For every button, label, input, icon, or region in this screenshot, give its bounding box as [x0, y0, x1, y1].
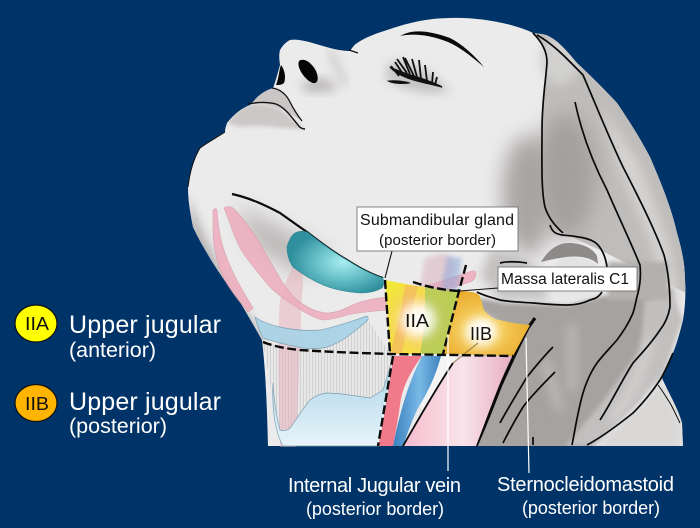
level IIB zone	[443, 291, 530, 356]
strap muscle	[278, 262, 303, 447]
soft shading on the side of the face	[502, 135, 554, 255]
label: internal jugular vein: Internal Jugular vein	[288, 475, 461, 497]
legend: IIB upper jugular posterior: Upper jugular	[69, 388, 221, 416]
label IIB: IIB	[470, 324, 492, 344]
badge IIA	[15, 305, 57, 342]
white gap	[418, 356, 458, 408]
legend: IIB upper jugular posterior: (posterior)	[69, 414, 167, 438]
face and hair silhouette	[180, 10, 700, 450]
label: internal jugular vein: (posterior border)	[306, 499, 444, 519]
hyoid bone	[255, 316, 368, 349]
label IIA: IIA	[405, 311, 429, 331]
leader line: massa lateralis	[460, 288, 498, 291]
lower lip shading	[227, 104, 305, 129]
thyroid cartilage	[273, 357, 393, 446]
callout: submandibular gland	[357, 207, 518, 251]
submandibular gland	[287, 231, 384, 293]
faint muscle edge over level IIB	[453, 343, 478, 363]
callout: massa lateralis C1: Massa lateralis C1	[501, 271, 629, 288]
legend: IIA upper jugular anterior: (anterior)	[69, 338, 156, 362]
legend: IIA upper jugular anterior: Upper jugular	[69, 311, 221, 339]
label: internal jugular vein	[288, 475, 461, 519]
badge IIA: IIA	[25, 314, 49, 334]
callout: submandibular gland: (posterior border)	[379, 232, 496, 249]
sternocleidomastoid anterior edge	[403, 363, 453, 446]
jugular vein	[393, 356, 441, 446]
leader line: internal jugular vein	[447, 335, 449, 471]
hair mass	[534, 33, 686, 292]
legend: IIA upper jugular anterior	[15, 305, 221, 362]
badge IIB: IIB	[25, 394, 49, 414]
callout: massa lateralis C1	[498, 267, 637, 291]
lips	[248, 88, 305, 129]
ear	[541, 243, 600, 268]
badge IIB	[15, 384, 57, 422]
sternocleidomastoid muscle	[403, 356, 512, 446]
dashed level boundaries	[263, 265, 513, 446]
carotid artery	[378, 356, 422, 446]
digastric muscle strands	[213, 206, 476, 320]
striped thyroid membrane	[263, 318, 393, 430]
leader line: submandibular gland	[385, 251, 392, 278]
earlobe	[544, 273, 600, 297]
callout: submandibular gland: Submandibular gland	[360, 212, 514, 229]
hair tone behind the ear	[608, 262, 668, 300]
label: sternocleidomastoid	[497, 474, 674, 518]
label: sternocleidomastoid: Sternocleidomastoid	[497, 474, 674, 496]
leader line: sternocleidomastoid	[526, 338, 529, 473]
legend: IIB upper jugular posterior	[15, 384, 221, 438]
vessels above level II	[420, 253, 455, 290]
eye and eyebrow	[388, 31, 484, 87]
chin contour	[188, 132, 225, 187]
white dashes on carotid edge	[378, 356, 393, 446]
label: sternocleidomastoid: (posterior border)	[522, 498, 660, 518]
level IIA zone	[385, 280, 460, 354]
shadows beneath the jaw	[188, 195, 265, 345]
lower neck hair	[470, 290, 672, 450]
hair and neck contour lines	[232, 33, 680, 446]
illustration: head and neck	[180, 10, 700, 450]
nose	[276, 50, 358, 85]
